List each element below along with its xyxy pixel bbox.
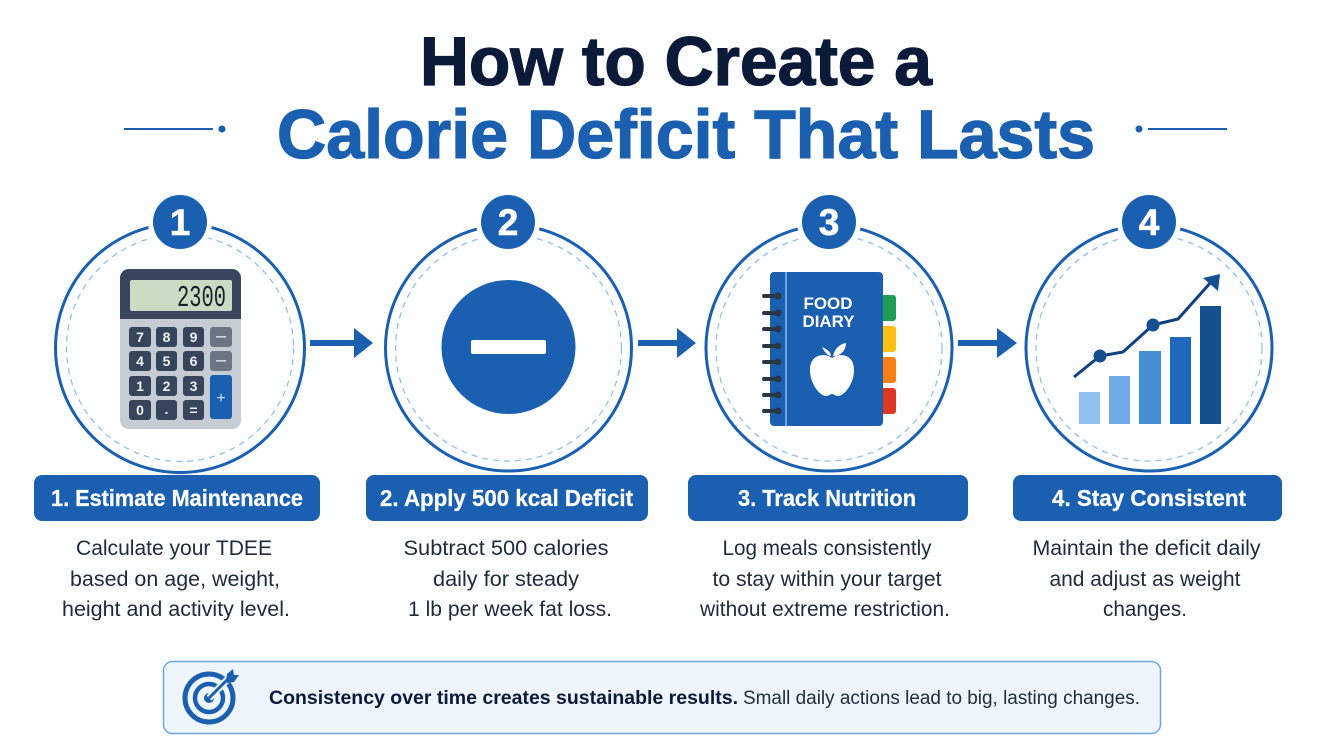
step 1 description: Calculate your TDEE [76, 537, 272, 560]
step 2 description [404, 537, 612, 621]
arrow 3 to 4 [958, 328, 1017, 358]
arrow 1 to 2 [310, 328, 373, 358]
step 4 label: 4. Stay Consistent [1052, 485, 1246, 511]
step 2 label: 2. Apply 500 kcal Deficit [380, 485, 633, 511]
step 1 description: based on age, weight, [70, 568, 280, 591]
step 1 label [34, 475, 320, 521]
icon: calculator: 8 [163, 329, 171, 345]
step 2 description: daily for steady [433, 568, 580, 591]
icon: calculator: 4 [136, 353, 144, 369]
title [277, 23, 1095, 173]
icon: food diary: DIARY [802, 312, 855, 331]
icon: calculator: . [165, 401, 168, 417]
icon: growth chart [1074, 274, 1221, 424]
step 4 description: changes. [1103, 598, 1187, 621]
icon: calculator: 5 [163, 353, 171, 369]
step 2 description: Subtract 500 calories [404, 537, 608, 560]
step 2 ring [386, 225, 632, 471]
step 1 description [62, 537, 290, 621]
step 1 ring [56, 224, 304, 472]
icon: calculator: 1 [136, 378, 144, 394]
icon: target with arrow [185, 669, 239, 722]
step 4 number badge: 4 [1139, 202, 1160, 243]
step 4 description: Maintain the deficit daily [1032, 537, 1261, 560]
step 2 number badge: 2 [498, 202, 518, 243]
step 3 description: without extreme restriction. [699, 598, 950, 621]
title line 1: How to Create a [420, 23, 933, 100]
icon: calculator: + [216, 390, 226, 407]
step 3 description [699, 537, 950, 621]
icon: calculator: 2 [163, 378, 171, 394]
step 4 description [1032, 537, 1261, 621]
step 4 label [1013, 475, 1282, 521]
icon: calculator [120, 269, 241, 429]
title line 2: Calorie Deficit That Lasts [277, 96, 1095, 173]
step 3 number badge [797, 190, 861, 254]
step 4 panel [1013, 190, 1282, 621]
step 3 ring [706, 225, 952, 471]
step 2 number badge [476, 190, 540, 254]
step 3 label [688, 475, 968, 521]
step 1 panel [34, 190, 320, 621]
step 1 label: 1. Estimate Maintenance [51, 485, 303, 511]
callout banner [164, 662, 1160, 734]
icon: calculator: 3 [190, 378, 198, 394]
icon: calculator: 2300 [177, 281, 226, 316]
step 3 description: to stay within your target [712, 568, 942, 591]
step 2 panel [366, 190, 648, 621]
icon: calculator: 6 [190, 353, 198, 369]
step 2 description: 1 lb per week fat loss. [408, 598, 612, 621]
icon: calculator: 7 [136, 329, 144, 345]
callout text: Consistency over time creates sustainable results. [269, 688, 738, 709]
step 4 ring [1026, 225, 1272, 471]
step 3 label: 3. Track Nutrition [738, 485, 916, 511]
step 4 number badge [1117, 190, 1181, 254]
step 1 description: height and activity level. [62, 598, 290, 621]
step 3 number badge: 3 [819, 202, 839, 243]
step 4 description: and adjust as weight [1050, 568, 1241, 591]
callout text continued: Small daily actions lead to big, lasting changes. [743, 688, 1140, 709]
step 2 label [366, 475, 648, 521]
icon: calculator: 0 [136, 402, 144, 418]
icon: minus circle [442, 280, 576, 414]
icon: food diary: FOOD [804, 294, 852, 313]
arrow 2 to 3 [638, 328, 696, 358]
step 1 number badge [148, 190, 212, 254]
step 3 description: Log meals consistently [722, 537, 932, 560]
step 3 panel [688, 190, 968, 621]
step 1 number badge: 1 [170, 202, 190, 243]
icon: food diary [764, 272, 896, 426]
icon: calculator: = [189, 402, 198, 418]
icon: calculator: 9 [190, 329, 198, 345]
